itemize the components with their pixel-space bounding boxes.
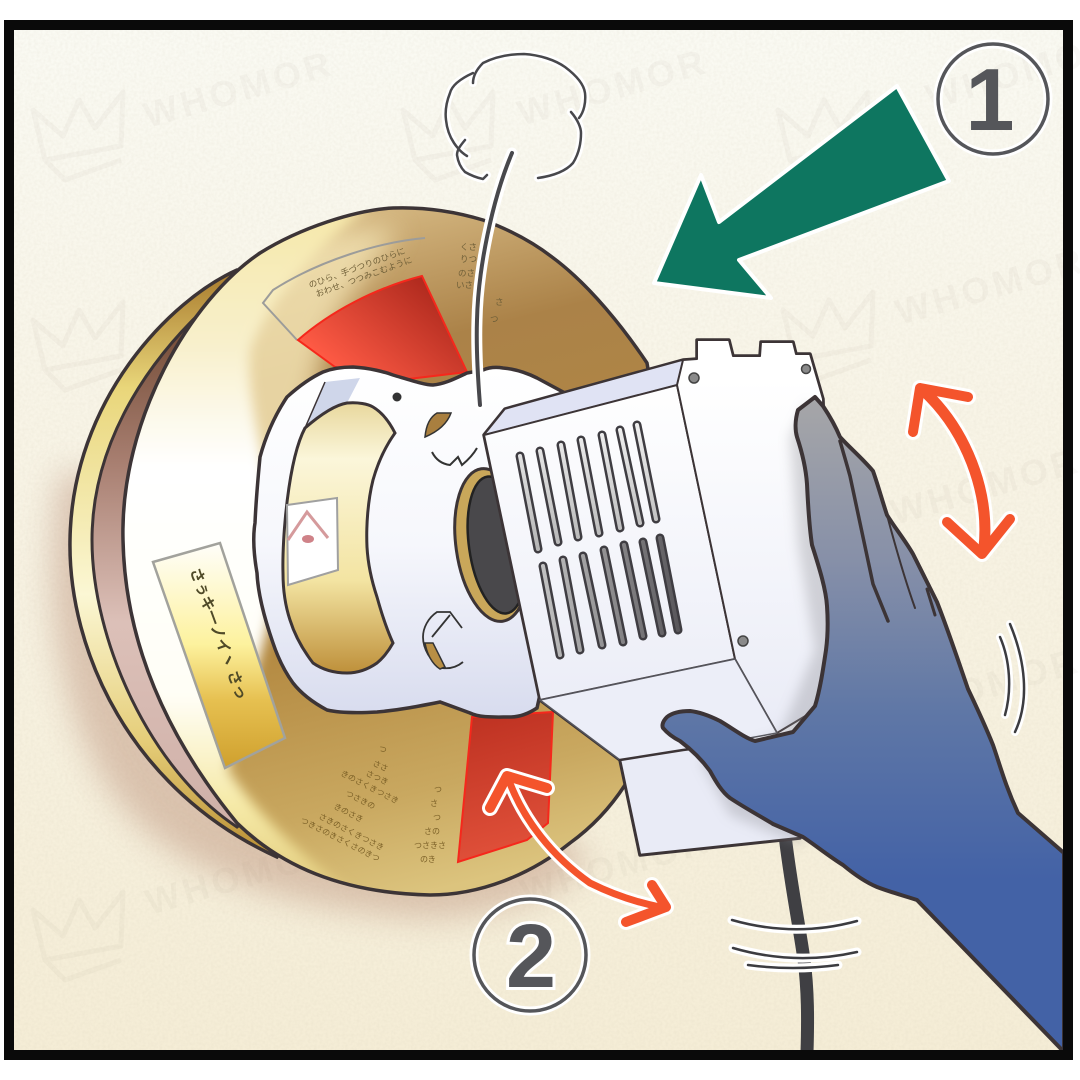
bracket: gold slot xyxy=(283,403,395,673)
cream glow on disc xyxy=(242,218,401,470)
printed instructions bottom: のき xyxy=(420,855,436,864)
steam puff xyxy=(446,54,585,405)
bracket: gold socket ring xyxy=(446,464,538,626)
watermarks: WHOMOR xyxy=(886,639,1080,733)
disc outline xyxy=(123,208,680,895)
printed instructions bottom xyxy=(299,744,446,864)
watermarks: WHOMOR xyxy=(141,829,341,923)
printed instructions top: つ xyxy=(490,314,499,324)
printed instructions bottom: つきさのきさくさのきつ xyxy=(299,816,381,864)
device: lower fold xyxy=(540,659,777,760)
watermarks: WHOMOR xyxy=(513,40,713,134)
device: screws xyxy=(689,364,810,646)
device: top bevel xyxy=(484,360,683,435)
printed instructions bottom: つ xyxy=(434,785,442,794)
printed instructions top: りつ xyxy=(460,254,477,264)
device: side panel xyxy=(677,340,832,733)
device: lower vents xyxy=(543,538,678,655)
vibration lines right xyxy=(1000,624,1024,732)
copper band xyxy=(92,280,400,827)
watermarks: WHOMOR xyxy=(516,434,716,528)
white crescent highlight xyxy=(124,214,366,878)
gold label xyxy=(153,543,285,768)
printed instructions top: さ xyxy=(495,297,504,307)
hand xyxy=(662,397,1064,1052)
printed instructions top: おわせ、つつみこむように xyxy=(314,255,414,299)
disc surface xyxy=(123,208,680,895)
printed instructions top xyxy=(307,242,504,324)
step number 1: 1 xyxy=(966,50,1014,149)
watermarks: WHOMOR xyxy=(139,42,339,136)
bracket: hook arc top xyxy=(432,448,477,465)
power cable xyxy=(785,835,808,1052)
printed instructions bottom: さの xyxy=(424,827,440,836)
grey outline of top sticker xyxy=(263,238,425,340)
disc shadow on wall xyxy=(51,470,590,918)
bracket: home sign xyxy=(287,498,338,585)
device: outer silhouette xyxy=(484,340,832,855)
watermarks: WHOMOR xyxy=(516,819,716,913)
printed instructions top: のひら、手づつりのひらに xyxy=(307,246,407,290)
red marker bottom xyxy=(458,712,553,862)
printed instructions bottom: つ xyxy=(433,813,441,822)
finger lines xyxy=(840,441,935,621)
step number 2 xyxy=(474,899,586,1011)
device: front face xyxy=(484,385,735,700)
bracket: screw hole xyxy=(392,392,402,402)
device: white projector box xyxy=(484,340,832,855)
vibration lines bottom xyxy=(732,920,857,968)
bracket: dark socket xyxy=(460,473,534,617)
printed instructions bottom: つさきさ xyxy=(414,841,446,850)
back ring xyxy=(70,270,400,857)
red double arrow bottom xyxy=(490,776,666,922)
bracket: hook gold bottom xyxy=(425,643,445,669)
printed instructions bottom: さ xyxy=(430,799,438,808)
printed instructions top: くさ xyxy=(460,242,477,252)
watermarks: WHOMOR xyxy=(886,439,1080,533)
red double arrow right xyxy=(913,388,1010,554)
bracket: hook arc bottom xyxy=(423,612,463,668)
printed instructions bottom: つさきの xyxy=(344,789,377,811)
printed instructions bottom: ささ xyxy=(371,759,389,774)
green arrow xyxy=(654,86,949,298)
hand shadow on device xyxy=(700,400,860,845)
device: bottom block xyxy=(620,735,800,855)
printed instructions bottom: きのさき xyxy=(332,802,365,824)
bracket: thin bevel line xyxy=(284,382,325,547)
step number 2: 2 xyxy=(506,907,556,1007)
step number 1 xyxy=(938,44,1048,154)
device: upper vents xyxy=(520,425,656,549)
bracket: shaded corner xyxy=(305,378,360,428)
printed instructions bottom: さつき xyxy=(364,769,390,787)
watermarks: WHOMOR xyxy=(551,624,751,718)
gold label: さぅキ一ノイヽ さっ xyxy=(186,566,250,702)
mount: back ring and gold disc xyxy=(70,205,680,895)
printed instructions bottom: さきのさくきつさき xyxy=(317,812,385,852)
bracket: hook slot top xyxy=(425,413,451,437)
printed instructions bottom: きのさくきつさき xyxy=(339,769,400,806)
red marker top xyxy=(298,276,467,380)
printed instructions top: のさ xyxy=(458,268,475,278)
white bracket plate xyxy=(254,367,570,717)
printed instructions bottom: つ xyxy=(377,744,388,755)
watermarks: WHOMOR xyxy=(141,444,341,538)
printed instructions top: いさき xyxy=(456,280,482,290)
